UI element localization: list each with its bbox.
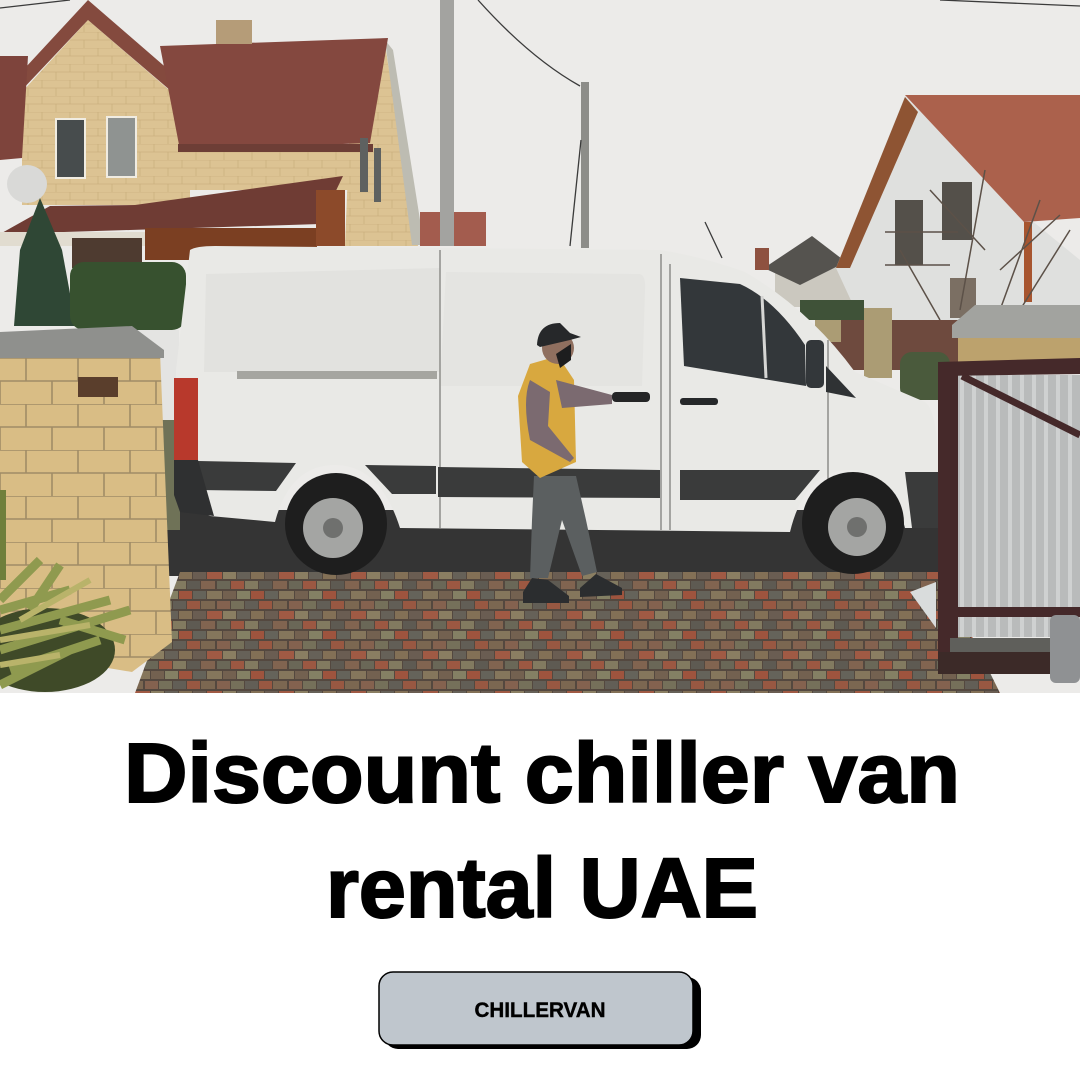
- gate: [938, 358, 1080, 683]
- trees and hedge: [14, 198, 186, 330]
- front wheel: [802, 472, 904, 574]
- left house: [0, 0, 486, 268]
- page background below photo: [0, 693, 1080, 1080]
- utility pole: [0, 0, 1080, 258]
- title: [124, 726, 960, 935]
- title: Discount chiller van: [124, 726, 960, 820]
- button: CHILLERVAN: [379, 972, 701, 1049]
- button: CHILLERVAN: CHILLERVAN: [474, 999, 606, 1022]
- ground: [165, 510, 940, 576]
- right house: [755, 95, 1080, 320]
- shrub: [0, 490, 130, 692]
- rear wheel: [285, 473, 387, 575]
- photo: van in driveway: [0, 0, 1080, 693]
- title: rental UAE: [326, 841, 758, 935]
- sky: [0, 0, 1080, 693]
- distant fence and pillars: [800, 300, 1080, 400]
- brick pillar: [0, 326, 172, 672]
- van side stripe: [198, 461, 938, 528]
- delivery man: [518, 323, 650, 603]
- van: [174, 246, 938, 575]
- white picket fence: [135, 330, 179, 420]
